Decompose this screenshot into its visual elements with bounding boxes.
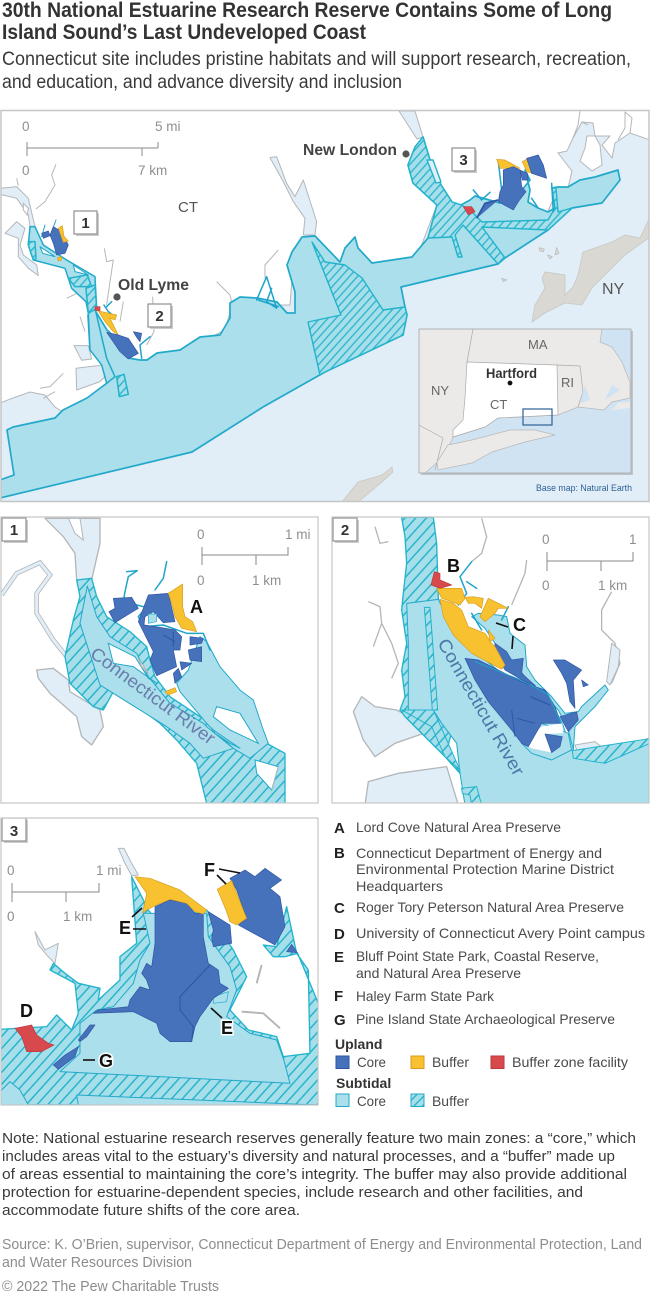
scale bar 3: 1 mi — [96, 863, 122, 878]
legend: subtidal — [336, 1075, 469, 1109]
label A: A — [190, 597, 203, 617]
site box 1: 1 — [81, 215, 90, 232]
scale bar 2: 1 km — [598, 578, 627, 593]
inset labels: NY — [431, 383, 449, 398]
scale bar 1 — [197, 527, 311, 588]
panel number 1 — [2, 518, 28, 543]
key: named sites: B — [334, 845, 345, 862]
subtitle: Connecticut site includes pristine habitats and will support research, recreation, — [2, 49, 631, 70]
scale bar 1: 1 mi — [285, 527, 311, 542]
key: named sites: E — [334, 949, 344, 966]
legend: subtidal: Subtidal — [336, 1075, 391, 1091]
label D: D — [20, 1001, 33, 1021]
note: accommodate future shifts of the core area. — [2, 1203, 300, 1219]
label F with leader lines: F — [204, 860, 215, 880]
scale bar 2 — [542, 532, 637, 593]
map 2 shapes — [353, 517, 650, 805]
river label 1: Connecticut River — [87, 643, 219, 748]
legend: upland: Core — [357, 1054, 386, 1070]
label G with leader line: G — [99, 1051, 113, 1071]
label G with leader line — [83, 1051, 113, 1071]
title — [2, 0, 612, 44]
map 1 shapes — [2, 518, 285, 803]
site box 3: 3 — [459, 152, 468, 169]
credit: base map: Base map: Natural Earth — [536, 483, 632, 494]
inset labels: Hartford — [486, 365, 537, 381]
source: and Water Resources Division — [2, 1255, 192, 1271]
scale bar 1: 1 km — [252, 573, 281, 588]
title: Island Sound’s Last Undeveloped Coast — [2, 21, 366, 44]
scale bar 1: 0 — [197, 573, 205, 588]
Block of land at bottom — [342, 467, 393, 502]
Connecticut River and site 1 and 2 details — [28, 220, 278, 397]
regional map frame — [1, 110, 649, 502]
site 3 details — [463, 155, 559, 282]
key: named sites: Roger Tory Peterson Natural Area Preserve — [356, 899, 624, 915]
panel 2: Connecticut River mouth — [332, 517, 650, 805]
panel 2 frame — [332, 517, 649, 803]
site box 3 — [452, 148, 477, 173]
key: named sites: Lord Cove Natural Area Preserve — [356, 819, 561, 835]
source — [2, 1237, 642, 1271]
subtitle: and education, and advance diversity and inclusion — [2, 72, 402, 93]
key: named sites — [334, 819, 645, 1029]
scale bar 3: 0 — [7, 863, 15, 878]
panel number 2: 2 — [341, 522, 349, 539]
key: named sites: F — [334, 988, 343, 1005]
panel 3 frame — [1, 818, 318, 1105]
scale bar 2: 0 — [542, 532, 550, 547]
panel number 2 — [333, 518, 359, 543]
key: named sites: A — [334, 820, 345, 837]
scale bar: 5 mi — [155, 119, 181, 134]
scale bar 3 — [7, 863, 122, 924]
label E lower with leader line: E — [221, 1018, 233, 1038]
scale bar 1: 0 — [197, 527, 205, 542]
legend: upland: Buffer — [432, 1054, 469, 1070]
Long Island — [532, 217, 650, 322]
label C with leader lines: C — [513, 615, 526, 635]
key: named sites: University of Connecticut Avery Point campus — [356, 925, 645, 941]
place: Old Lyme — [113, 277, 189, 301]
key: named sites: D — [334, 926, 345, 943]
label E lower with leader line — [211, 1008, 233, 1038]
panel 1: Lord Cove — [1, 517, 318, 803]
state label: NY: NY — [602, 281, 625, 298]
note: protection for estuarine-dependent species, include research and other facilities, and — [2, 1185, 583, 1201]
inset labels: RI — [561, 375, 574, 390]
label F with leader lines — [204, 860, 240, 884]
inset shadow — [421, 331, 633, 475]
state label: CT: CT — [178, 199, 198, 216]
inset locator box — [523, 409, 552, 425]
key: named sites: and Natural Area Preserve — [356, 965, 521, 981]
scale bar: 0 — [22, 119, 30, 134]
panel: regional map — [0, 111, 650, 502]
key: named sites: Bluff Point State Park, Coastal Reserve, — [356, 948, 599, 964]
key: named sites: C — [334, 900, 345, 917]
label E upper with leader lines — [119, 908, 146, 938]
label E upper with leader lines: E — [119, 918, 131, 938]
subtidal buffer hatch — [308, 137, 572, 375]
place: New London: New London — [303, 142, 397, 159]
scale bar — [22, 119, 181, 178]
legend: upland: Upland — [335, 1036, 382, 1052]
northeast inlets — [399, 111, 632, 171]
key: named sites: Environmental Protection Marine District — [356, 861, 614, 877]
panel 1 frame — [1, 517, 318, 803]
note: Note: National estuarine research reserves generally feature two main zones: a “core,” which — [2, 1131, 636, 1147]
inset labels — [431, 337, 574, 412]
panel number 3 — [2, 818, 28, 843]
scale bar 3: 0 — [7, 909, 15, 924]
panel number 3: 3 — [10, 823, 18, 840]
legend: upland — [335, 1036, 628, 1070]
inset frame — [419, 329, 631, 473]
subtidal core water — [0, 137, 620, 498]
site box 2 — [148, 304, 173, 329]
place: Old Lyme: Old Lyme — [118, 277, 189, 294]
key: named sites: Headquarters — [356, 878, 443, 894]
note: of areas essential to maintaining the core’s integrity. The buffer may also provide additional — [2, 1167, 627, 1183]
map 3 shapes — [0, 848, 318, 1105]
site box 1 — [74, 211, 99, 236]
note: includes areas vital to the estuary’s diversity and natural processes, and a “buffer” made up — [2, 1149, 615, 1165]
inset labels: MA — [528, 337, 548, 352]
legend: upland: Buffer zone facility — [512, 1054, 628, 1070]
scale bar: 0 — [22, 163, 30, 178]
panel 3: Bluff Point — [0, 818, 318, 1105]
inset labels: CT — [490, 397, 507, 412]
legend: subtidal: Core — [357, 1093, 386, 1109]
label B: B — [447, 556, 460, 576]
key: named sites: Haley Farm State Park — [356, 988, 495, 1004]
subtitle — [2, 49, 631, 93]
western shoreline and inlets — [0, 157, 317, 398]
label C with leader lines — [496, 615, 526, 649]
legend: subtidal: Buffer — [432, 1093, 469, 1109]
scale bar: 7 km — [138, 163, 167, 178]
site box 2: 2 — [155, 308, 164, 325]
key: named sites: Connecticut Department of Energy and — [356, 845, 602, 861]
note — [2, 1131, 636, 1219]
key: named sites: Pine Island State Archaeological Preserve — [356, 1011, 615, 1027]
scale bar 2: 0 — [542, 578, 550, 593]
river label 2: Connecticut River — [434, 635, 528, 779]
panel number 1: 1 — [10, 522, 18, 539]
source: Source: K. O’Brien, supervisor, Connecticut Department of Energy and Environmental Protection, Land — [2, 1237, 642, 1253]
inset locator map — [419, 329, 631, 473]
scale bar 2: 1 — [629, 532, 637, 547]
sea — [0, 122, 650, 502]
scale bar 3: 1 km — [63, 909, 92, 924]
key: named sites: G — [334, 1012, 346, 1029]
